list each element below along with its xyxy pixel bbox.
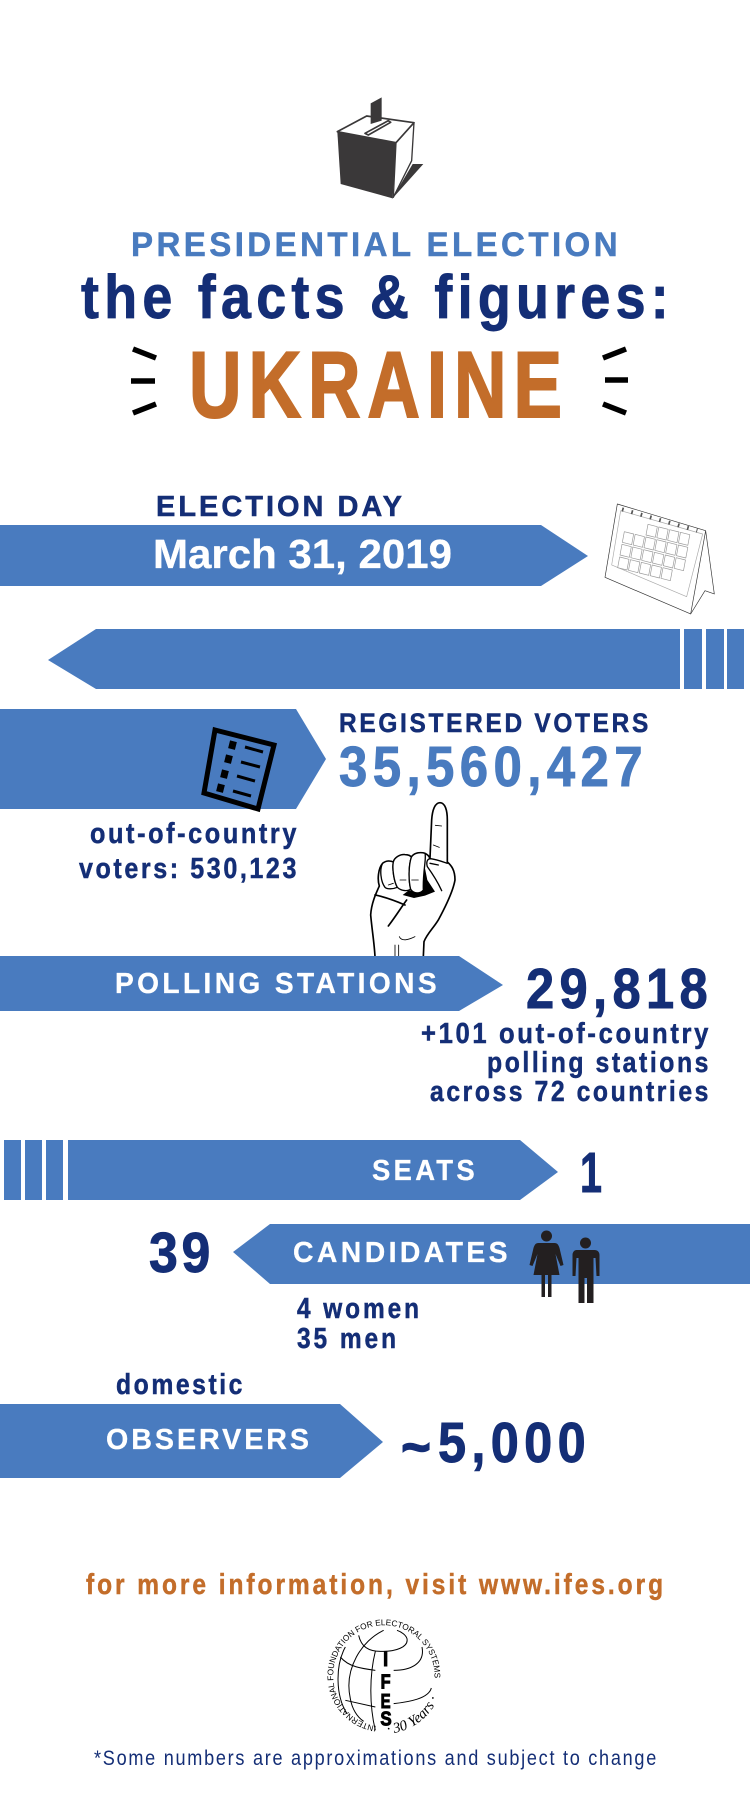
- text: out-of-country polling stations: polling stations: [487, 1047, 711, 1079]
- text: out-of-country voters: voters: 530,123: [79, 853, 299, 885]
- number: seats: 1: [580, 1141, 602, 1205]
- text: candidates by gender: 35 men: [297, 1323, 399, 1355]
- label: registered voters: REGISTERED VOTERS: [339, 708, 651, 738]
- icon: checklist: [204, 730, 274, 809]
- heading: Ukraine: UKRAINE: [189, 332, 569, 437]
- number: observers: 5,000: [438, 1411, 591, 1475]
- text: out-of-country polling stations: +101 out-of-country: [421, 1018, 711, 1050]
- logo: IFES globe: F: [381, 1672, 391, 1694]
- label: domestic: domestic: [116, 1369, 245, 1401]
- decorative burst ticks around Ukraine: [131, 349, 628, 413]
- text: out-of-country polling stations: across 72 countries: [430, 1076, 711, 1108]
- number: observers: ~: [402, 1423, 430, 1472]
- banner: polling stations: POLLING STATIONS: [115, 968, 440, 1000]
- heading: the facts & figures: the facts & figures:: [81, 263, 674, 331]
- banner: seats: SEATS: [372, 1155, 478, 1187]
- banner: election day date: [0, 525, 588, 586]
- text: candidates by gender: 4 women: [297, 1293, 422, 1325]
- number: registered voters: 35,560,427: [339, 735, 648, 799]
- banner: observers: OBSERVERS: [106, 1424, 312, 1456]
- text: out-of-country voters: out-of-country: [90, 818, 299, 850]
- banner: election day date: March 31, 2019: [153, 531, 452, 577]
- text: disclaimer: *Some numbers are approximations and subject to change: [94, 1747, 658, 1770]
- number: candidates: 39: [149, 1221, 214, 1285]
- logo: IFES globe: S: [380, 1708, 392, 1730]
- logo: IFES globe: I: [383, 1649, 388, 1671]
- banner: registered voters arrow: [0, 709, 326, 809]
- icon: hand with raised index finger: [371, 803, 455, 957]
- banner: candidates: CANDIDATES: [293, 1237, 511, 1269]
- heading: presidential election: PRESIDENTIAL ELECTION: [131, 226, 621, 264]
- logo: IFES globe: E: [381, 1691, 391, 1713]
- label: election day: ELECTION DAY: [156, 491, 405, 523]
- icon: desk calendar: [605, 504, 714, 614]
- text: candidates by gender: [297, 1293, 422, 1355]
- text: out-of-country polling stations: [421, 1018, 711, 1108]
- number: polling stations: 29,818: [526, 957, 713, 1021]
- banner: decorative left arrow with stripes: [48, 629, 744, 689]
- text: out-of-country voters: [79, 818, 299, 885]
- icon: woman and man figures: [530, 1230, 600, 1303]
- banner: observers: [0, 1404, 383, 1478]
- logo: IFES globe: INTERNATIONAL FOUNDATION FOR ELECTORAL SYSTEMS: [327, 1620, 440, 1732]
- icon: ballot box: [337, 97, 423, 199]
- logo: IFES globe: · 30 Years ·: [388, 1697, 434, 1733]
- banner: candidates: [233, 1224, 750, 1284]
- banner: polling stations: [0, 956, 503, 1011]
- banner: seats: [4, 1140, 558, 1200]
